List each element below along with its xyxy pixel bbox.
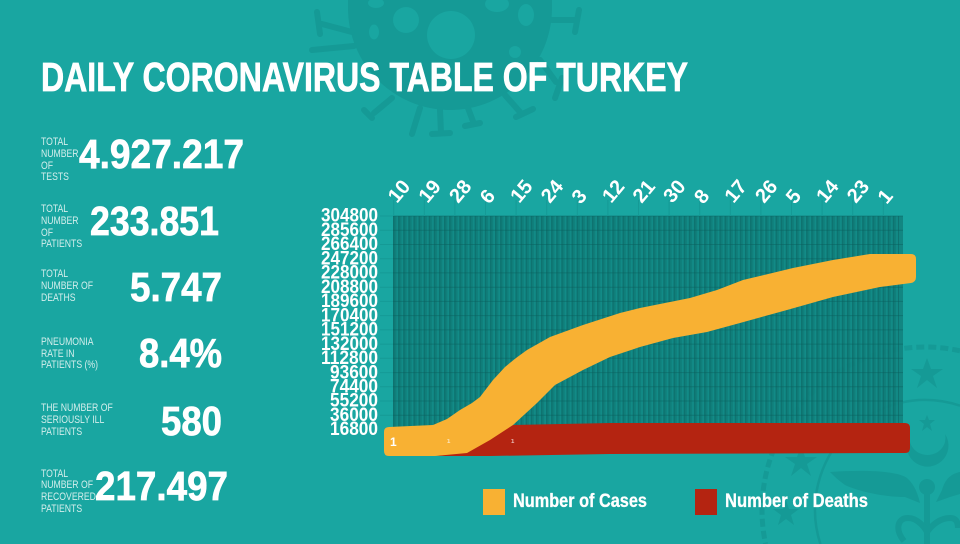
y axis labels: 151200: [321, 320, 378, 341]
plot grid: [380, 200, 903, 430]
y axis labels: 266400: [321, 234, 378, 255]
stat: total patients: TOTAL: [41, 203, 68, 215]
x axis labels: 3: [568, 186, 592, 208]
x axis labels: 23: [843, 176, 874, 207]
stat: total tests: TOTAL: [41, 136, 68, 148]
x axis labels: 21: [629, 176, 660, 207]
stat: recovered: 217.497: [95, 463, 228, 509]
stat: total deaths: TOTAL: [41, 268, 68, 280]
stat: total tests: OF: [41, 160, 53, 172]
x axis labels: [384, 175, 898, 208]
y axis labels: [321, 206, 378, 440]
x axis labels: 24: [537, 175, 569, 207]
x axis labels: 19: [415, 176, 446, 207]
x axis labels: 10: [384, 176, 415, 207]
x axis labels: 6: [476, 186, 500, 208]
legend: deaths: [695, 489, 868, 515]
y axis labels: 170400: [321, 305, 378, 326]
stat: seriously ill: SERIOUSLY ILL: [41, 414, 105, 426]
cases band: [384, 254, 916, 456]
stat: total patients: [41, 198, 219, 250]
stat: seriously ill: 580: [161, 398, 222, 444]
legend: deaths: Number of Deaths: [725, 491, 868, 512]
y axis labels: 285600: [321, 220, 378, 241]
chart: [321, 175, 916, 456]
y axis labels: 112800: [321, 348, 378, 369]
x axis labels: 12: [598, 176, 629, 207]
x axis labels: 17: [721, 176, 752, 207]
stat: seriously ill: THE NUMBER OF: [41, 402, 113, 414]
y axis labels: 55200: [330, 391, 378, 412]
emblem illustration: [762, 347, 960, 544]
stat: seriously ill: [41, 398, 222, 444]
legend: cases: [483, 489, 647, 515]
x axis labels: 15: [506, 176, 538, 207]
stat: total deaths: DEATHS: [41, 292, 76, 304]
stat: recovered: [41, 463, 228, 515]
y axis labels: 304800: [321, 206, 378, 227]
x axis labels: 1: [874, 186, 898, 208]
stat: pneumonia rate: RATE IN: [41, 348, 75, 360]
legend: cases: Number of Cases: [513, 491, 647, 512]
data labels: 1: [447, 439, 451, 445]
stat: recovered: NUMBER OF: [41, 479, 93, 491]
x axis labels: 5: [782, 186, 806, 208]
stat: total patients: PATIENTS: [41, 238, 82, 250]
stat: recovered: TOTAL: [41, 468, 68, 480]
stat: total patients: 233.851: [90, 198, 219, 244]
stat: seriously ill: PATIENTS: [41, 426, 82, 438]
stat: total deaths: NUMBER OF: [41, 280, 93, 292]
y axis labels: 247200: [321, 248, 378, 269]
stat: total tests: NUMBER: [41, 148, 79, 160]
stat: pneumonia rate: [41, 330, 222, 376]
y axis labels: 189600: [321, 291, 378, 312]
stat: total tests: 4.927.217: [79, 131, 244, 177]
stat: total deaths: 5.747: [130, 264, 222, 310]
virus illustration: [312, 0, 579, 134]
data labels: 1: [511, 439, 515, 445]
y axis labels: 228000: [321, 263, 378, 284]
y axis labels: 16800: [330, 419, 378, 440]
stat: total patients: OF: [41, 227, 53, 239]
stat: total patients: NUMBER: [41, 215, 79, 227]
x axis labels: 14: [812, 175, 844, 207]
y axis labels: 36000: [330, 405, 378, 426]
deaths band: [436, 423, 910, 456]
stat: pneumonia rate: PATIENTS (%): [41, 359, 98, 371]
y axis labels: 74400: [330, 376, 378, 398]
stat: total tests: [41, 131, 244, 183]
x axis labels: 8: [690, 186, 714, 208]
stat: pneumonia rate: 8.4%: [139, 330, 222, 376]
stat: pneumonia rate: PNEUMONIA: [41, 336, 94, 348]
y axis labels: 93600: [330, 362, 378, 383]
data labels: 1: [390, 435, 397, 449]
stat: recovered: RECOVERED: [41, 491, 96, 503]
data labels: [390, 435, 515, 449]
y axis labels: 132000: [321, 334, 378, 355]
stat: total tests: TESTS: [41, 171, 69, 183]
title: DAILY CORONAVIRUS TABLE OF TURKEY: [41, 54, 688, 100]
x axis labels: 26: [751, 176, 782, 207]
stat: recovered: PATIENTS: [41, 503, 82, 515]
x axis labels: 28: [445, 176, 476, 207]
stat: total deaths: [41, 264, 222, 310]
y axis labels: 208800: [321, 277, 378, 298]
x axis labels: 30: [659, 176, 691, 207]
